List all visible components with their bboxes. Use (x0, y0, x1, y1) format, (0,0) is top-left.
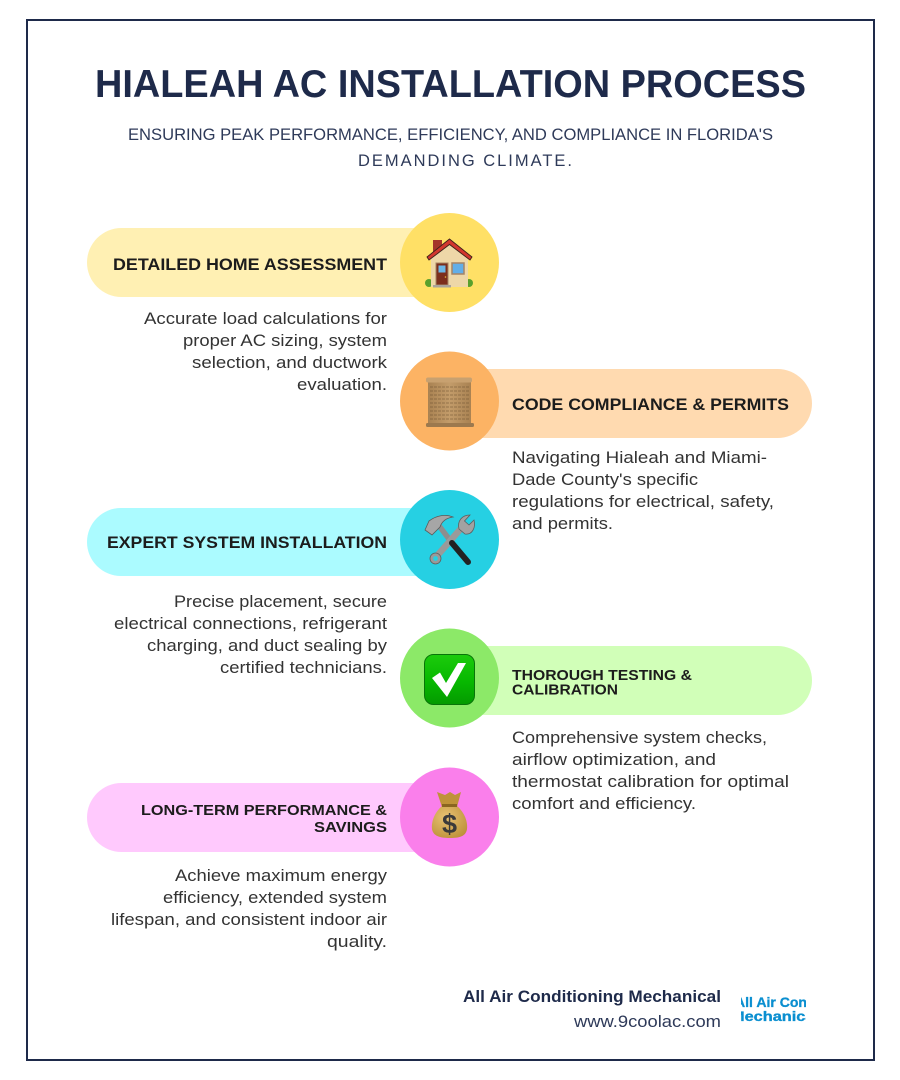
footer website: www.9coolac.com (573, 1013, 721, 1031)
step 3 description: charging, and duct sealing by (147, 636, 388, 655)
icon: scroll (426, 378, 474, 427)
step 2 circle (400, 352, 499, 450)
step 2 description: Navigating Hialeah and Miami- (512, 448, 767, 467)
icon: money bag (432, 792, 467, 839)
step 3 description: certified technicians. (220, 658, 387, 677)
step 5 description: efficiency, extended system (163, 888, 387, 907)
icon: check mark (424, 654, 474, 704)
title: HIALEAH AC INSTALLATION PROCESS (95, 63, 806, 106)
step 4 description: thermostat calibration for optimal (512, 772, 789, 791)
icon: hammer and wrench (425, 515, 475, 564)
step 2 description: regulations for electrical, safety, (512, 492, 774, 511)
step 4 pill (450, 646, 812, 715)
step 4 circle (400, 628, 499, 728)
subtitle (128, 126, 773, 170)
subtitle: ENSURING PEAK PERFORMANCE, EFFICIENCY, AND COMPLIANCE IN FLORIDA'S (128, 126, 773, 144)
subtitle: DEMANDING CLIMATE. (358, 152, 572, 170)
step 5 heading: LONG-TERM PERFORMANCE & (141, 802, 387, 819)
step 5 heading: SAVINGS (314, 819, 387, 836)
step 3 description: electrical connections, refrigerant (114, 614, 387, 633)
step 1 description: proper AC sizing, system (183, 331, 387, 350)
step 1: detailed home assessment (87, 213, 499, 394)
step 5: long-term performance and savings (87, 768, 499, 951)
step 5 description (111, 866, 388, 951)
step 4 description: Comprehensive system checks, (512, 728, 767, 747)
step 1 description: selection, and ductwork (192, 353, 388, 372)
step 4: thorough testing and calibration (400, 628, 812, 813)
step 5 description: quality. (327, 932, 387, 951)
step 1 heading: DETAILED HOME ASSESSMENT (113, 255, 388, 274)
footer company name: All Air Conditioning Mechanical (463, 988, 721, 1006)
step 1 description (144, 309, 388, 394)
step 4 heading: THOROUGH TESTING & (512, 667, 692, 684)
step 3: expert system installation (87, 490, 499, 677)
footer logo: All Air Con (735, 995, 807, 1010)
step 2 heading: CODE COMPLIANCE & PERMITS (512, 395, 789, 414)
step 1 description: evaluation. (297, 375, 387, 394)
step 4 heading (512, 667, 692, 698)
step 1 description: Accurate load calculations for (144, 309, 387, 328)
icon: money bag: $ (442, 809, 457, 839)
step 1 pill (87, 228, 449, 297)
icon: house (425, 239, 473, 288)
step 2 pill (450, 369, 812, 438)
step 2 description: and permits. (512, 514, 613, 533)
step 3 pill (87, 508, 449, 576)
step 4 description (512, 728, 789, 813)
step 4 description: airflow optimization, and (512, 750, 716, 769)
footer logo (731, 995, 819, 1024)
step 5 description: lifespan, and consistent indoor air (111, 910, 387, 929)
step 4 description: comfort and efficiency. (512, 794, 696, 813)
step 5 description: Achieve maximum energy (175, 866, 388, 885)
step 5 circle (400, 768, 499, 866)
step 3 circle (400, 490, 499, 589)
step 1 circle (400, 213, 499, 312)
step 4 heading: CALIBRATION (512, 682, 618, 698)
step 3 description (114, 592, 388, 677)
step 2 description (512, 448, 774, 533)
footer logo: Mechanical (731, 1009, 819, 1024)
step 5 pill (87, 783, 449, 852)
step 5 heading (141, 802, 387, 836)
step 3 description: Precise placement, secure (174, 592, 387, 611)
step 3 heading: EXPERT SYSTEM INSTALLATION (107, 533, 387, 552)
step 2 description: Dade County's specific (512, 470, 699, 489)
step 2: code compliance and permits (400, 352, 812, 533)
